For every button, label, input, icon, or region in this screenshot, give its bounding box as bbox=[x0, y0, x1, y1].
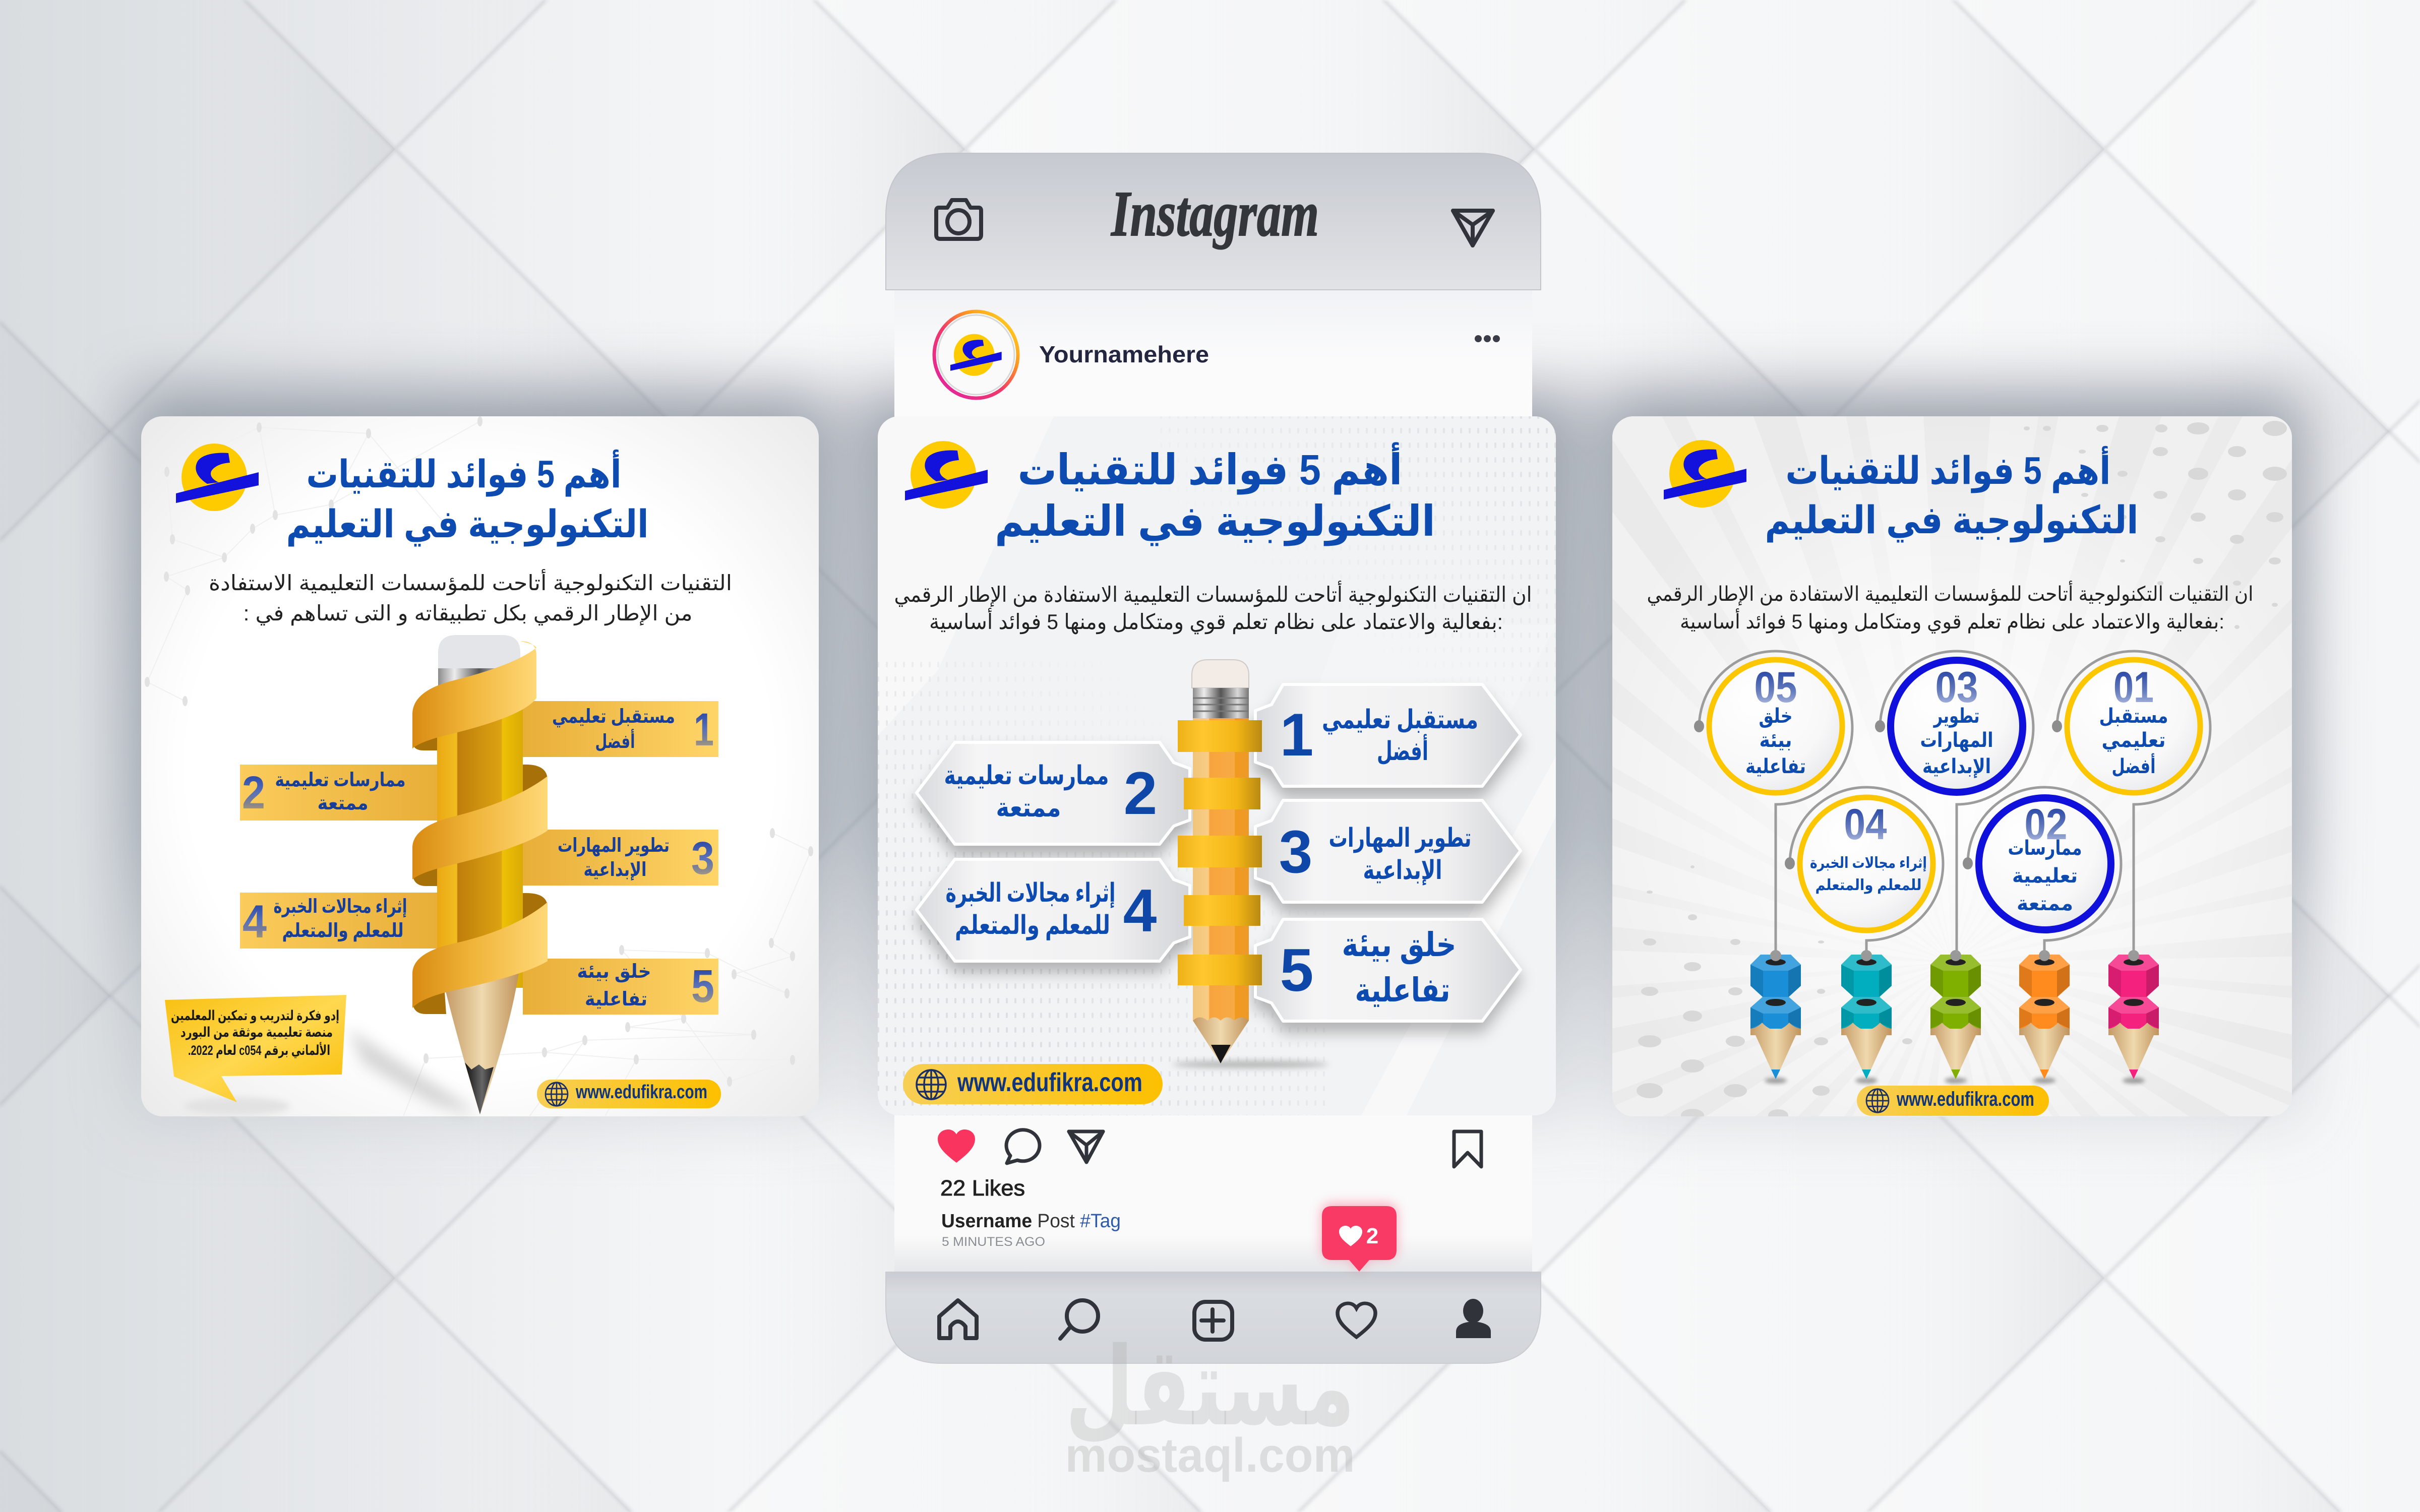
icon: heart outline bbox=[1338, 1303, 1375, 1337]
benefit 2: ممتعة bbox=[996, 793, 1061, 823]
card texture bbox=[878, 416, 1558, 1116]
intro text bbox=[1647, 581, 2254, 634]
logo bbox=[905, 441, 988, 509]
tag 1 shape bbox=[1255, 684, 1521, 786]
callout: accreditation note: الألماني برقم c054 لعام 2022. bbox=[188, 1042, 330, 1058]
caption: Username Post #Tag bbox=[941, 1211, 1121, 1232]
benefit 1 bbox=[1280, 701, 1478, 769]
icon: add bbox=[1194, 1302, 1232, 1340]
icon: more dots bbox=[1475, 335, 1500, 342]
benefit 5: خلق بيئة bbox=[1342, 926, 1456, 965]
logo bbox=[1664, 440, 1746, 508]
benefit 3: الإبداعية bbox=[1363, 856, 1442, 886]
benefit 1: 1 bbox=[1280, 701, 1313, 769]
tag 2: 2 bbox=[242, 767, 265, 818]
tag 5 bbox=[523, 959, 718, 1015]
intro text bbox=[894, 581, 1532, 635]
benefit circle 01 bbox=[2052, 651, 2210, 954]
benefit circle 03: الإبداعية bbox=[1922, 755, 1991, 778]
benefit 5: 5 bbox=[1280, 936, 1313, 1004]
profile row bbox=[934, 311, 1500, 398]
website pill: www.edufikra.com bbox=[1896, 1088, 2034, 1110]
benefit circle 04: 04 bbox=[1844, 800, 1887, 849]
username: Yournamehere bbox=[1039, 341, 1209, 367]
bottom navigation bar bbox=[886, 1272, 1541, 1363]
title: أهم 5 فوائد للتقنيات bbox=[1017, 442, 1403, 495]
tag 5: 5 bbox=[691, 961, 714, 1012]
benefit circle 02: تعليمية bbox=[2012, 865, 2078, 887]
benefit circle 01: مستقبل bbox=[2099, 705, 2168, 727]
benefit 2: ممارسات تعليمية bbox=[944, 761, 1109, 791]
benefit 5 bbox=[1280, 926, 1456, 1009]
tag 2: ممتعة bbox=[318, 793, 368, 814]
callout: accreditation note: إدو فكرة لتدريب و تمكين المعلمين bbox=[171, 1008, 339, 1024]
title: أهم 5 فوائد للتقنيات bbox=[307, 449, 621, 497]
benefit circle 01: أفضل bbox=[2111, 753, 2156, 778]
icon: comment bbox=[1006, 1130, 1040, 1163]
icon: home bbox=[939, 1300, 977, 1338]
tag 3: الإبداعية bbox=[584, 859, 646, 880]
benefit circle 05: خلق bbox=[1759, 705, 1793, 728]
title bbox=[286, 449, 648, 547]
phone body bbox=[894, 290, 1532, 1275]
website pill bbox=[903, 1064, 1163, 1104]
benefit circle 02: ممتعة bbox=[2017, 893, 2073, 915]
icon: profile bbox=[1456, 1299, 1491, 1338]
callout: accreditation note: منصة تعليمية موثقة من البورد bbox=[180, 1025, 333, 1040]
tag 3: 3 bbox=[691, 833, 714, 884]
title: أهم 5 فوائد للتقنيات bbox=[1786, 446, 2110, 493]
pencil: green bbox=[1930, 950, 1981, 1084]
benefit 1: أفضل bbox=[1377, 734, 1428, 766]
tag 3 bbox=[523, 830, 718, 886]
panel: left post bbox=[141, 416, 819, 1116]
sunburst and dots texture bbox=[1612, 416, 2292, 1122]
tag 3: تطوير المهارات bbox=[558, 835, 670, 856]
tag 4 shape bbox=[917, 859, 1190, 961]
benefit circle 04: إثراء مجالات الخبرة bbox=[1810, 855, 1927, 872]
shadow behind cards and phone bbox=[129, 391, 2307, 1126]
benefit 4: 4 bbox=[1123, 877, 1157, 944]
callout: accreditation note bbox=[165, 995, 346, 1115]
website pill bbox=[537, 1080, 721, 1108]
benefit circle 03: تطوير bbox=[1933, 705, 1979, 728]
tag 3 shape bbox=[1255, 800, 1521, 902]
notification bubble: 2 bbox=[1366, 1224, 1378, 1248]
tag 1: أفضل bbox=[595, 729, 635, 752]
intro text: ان التقنيات التكنولوجية أتاحت للمؤسسات التعليمية الاستفادة من الإطار الرقمي bbox=[894, 581, 1532, 607]
panel: center post bbox=[878, 416, 1558, 1116]
tag 5: خلق بيئة bbox=[577, 961, 651, 982]
benefit 5: تفاعلية bbox=[1355, 971, 1450, 1009]
pencil: blue bbox=[1750, 950, 1801, 1084]
pencil: pink bbox=[2108, 950, 2159, 1084]
icon: send outline bbox=[1069, 1131, 1103, 1162]
tag 4: إثراء مجالات الخبرة bbox=[273, 896, 407, 918]
tip bbox=[1193, 1017, 1249, 1063]
tag 4 bbox=[240, 893, 437, 949]
website pill: www.edufikra.com bbox=[575, 1082, 707, 1103]
tag 2 bbox=[240, 765, 437, 821]
tag 4: 4 bbox=[243, 896, 267, 948]
title bbox=[995, 442, 1435, 546]
network pattern bbox=[145, 416, 813, 1116]
benefit 3 bbox=[1279, 818, 1471, 886]
intro text bbox=[209, 569, 732, 626]
benefit 4: للمعلم والمتعلم bbox=[955, 911, 1110, 940]
pencil: teal bbox=[1841, 950, 1892, 1084]
tag 1: 1 bbox=[694, 704, 714, 755]
website pill: www.edufikra.com bbox=[957, 1068, 1142, 1097]
watermark bbox=[1065, 1326, 1355, 1482]
intro text: ان التقنيات التكنولوجية أتاحت للمؤسسات التعليمية الاستفادة من الإطار الرقمي bbox=[1647, 581, 2254, 606]
eraser bbox=[1192, 660, 1249, 688]
benefit 4 bbox=[946, 877, 1157, 944]
profile avatar bbox=[934, 311, 1018, 398]
ferrule bbox=[1193, 688, 1249, 719]
logo bbox=[176, 444, 259, 511]
phone mockup bbox=[886, 153, 1541, 1363]
instagram wordmark: Instagram bbox=[1110, 178, 1319, 249]
benefit tags bbox=[917, 684, 1521, 1021]
benefit 1: مستقبل تعليمي bbox=[1322, 705, 1478, 735]
benefit 2 bbox=[944, 760, 1157, 827]
watermark latin: mostaql.com bbox=[1065, 1428, 1355, 1482]
icon: bookmark bbox=[1454, 1131, 1481, 1167]
notification bubble bbox=[1322, 1206, 1397, 1272]
post actions bbox=[938, 1129, 1481, 1167]
pencil bbox=[1178, 660, 1262, 1063]
benefit circle 03: 03 bbox=[1935, 663, 1978, 712]
pencil: orange bbox=[2019, 950, 2070, 1084]
benefit circle 02: ممارسات bbox=[2008, 837, 2082, 860]
tag 1 bbox=[523, 701, 718, 757]
icon: camera bbox=[936, 200, 981, 239]
benefit 2: 2 bbox=[1124, 760, 1157, 827]
title: التكنولوجية في التعليم bbox=[1765, 499, 2139, 543]
intro text: :بفعالية والاعتماد على نظام تعلم قوي ومتكامل ومنها 5 فوائد أساسية bbox=[929, 608, 1503, 635]
watermark arabic: مستقل bbox=[1065, 1326, 1355, 1447]
icon: search bbox=[1060, 1300, 1098, 1339]
tag 2 shape bbox=[917, 742, 1190, 844]
ribbon bands bbox=[1178, 720, 1262, 985]
benefit circle 02 bbox=[1963, 787, 2121, 954]
intro text: من الإطار الرقمي بكل تطبيقاته و التى تساهم في : bbox=[243, 601, 693, 626]
intro text: :بفعالية والاعتماد على نظام تعلم قوي ومتكامل ومنها 5 فوائد أساسية bbox=[1680, 608, 2224, 634]
barrel bbox=[1193, 718, 1249, 1021]
benefit circle 01: تعليمي bbox=[2101, 729, 2166, 752]
icon: send bbox=[1453, 211, 1493, 245]
title: التكنولوجية في التعليم bbox=[286, 503, 648, 547]
tag 2: ممارسات تعليمية bbox=[275, 770, 405, 791]
benefit circle 01: 01 bbox=[2113, 663, 2154, 712]
phone header bar bbox=[886, 153, 1541, 290]
title bbox=[1765, 446, 2139, 543]
title: التكنولوجية في التعليم bbox=[995, 497, 1435, 546]
benefit circle 03 bbox=[1875, 651, 2033, 954]
benefit circle 05: بيئة bbox=[1760, 729, 1792, 751]
ground shadow of pencil bbox=[1172, 1061, 1328, 1068]
pencils row bbox=[1750, 950, 2159, 1084]
website pill bbox=[1857, 1086, 2049, 1116]
tag 4: للمعلم والمتعلم bbox=[282, 920, 403, 942]
benefit circle 04: للمعلم والمتعلم bbox=[1815, 877, 1922, 894]
benefit circle 03: المهارات bbox=[1920, 729, 1993, 752]
benefit circle 04 bbox=[1785, 787, 1943, 954]
tag 5: تفاعلية bbox=[585, 989, 647, 1010]
icon: filled heart bbox=[938, 1129, 975, 1163]
benefit circle 05: 05 bbox=[1754, 663, 1797, 712]
benefit circle 02: 02 bbox=[2025, 800, 2067, 849]
likes count: 22 Likes bbox=[940, 1176, 1025, 1201]
benefit 3: 3 bbox=[1279, 818, 1312, 886]
benefit 3: تطوير المهارات bbox=[1329, 824, 1471, 853]
benefit 4: إثراء مجالات الخبرة bbox=[946, 878, 1115, 908]
benefit circle 05 bbox=[1694, 651, 1852, 954]
tag 1: مستقبل تعليمي bbox=[552, 706, 675, 727]
intro text: التقنيات التكنولوجية أتاحت للمؤسسات التعليمية الاستفادة bbox=[209, 569, 732, 595]
timestamp: 5 MINUTES AGO bbox=[942, 1235, 1045, 1249]
pencil wrapped in ribbon bbox=[348, 635, 548, 1115]
yellow tags bbox=[240, 701, 718, 1015]
benefit circle 05: تفاعلية bbox=[1745, 755, 1806, 778]
panel: right post bbox=[1612, 416, 2292, 1122]
tag 5 shape bbox=[1255, 919, 1521, 1021]
